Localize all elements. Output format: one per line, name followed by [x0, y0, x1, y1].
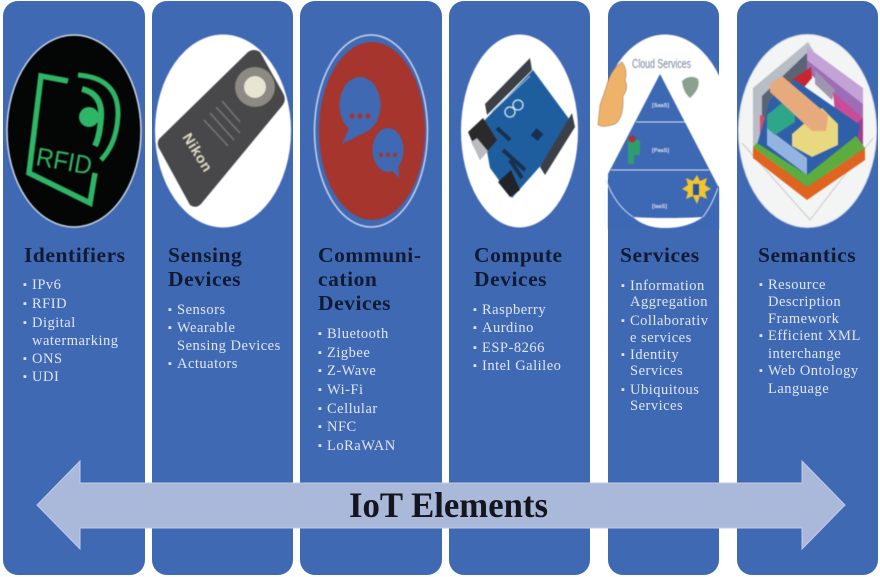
heading: Sensing Devices — [168, 243, 242, 291]
list: services: Services — [630, 398, 683, 414]
heading: Semantics: Semantics — [758, 243, 856, 267]
icon: Arduino board — [461, 34, 578, 228]
list: compute devices: Raspberry — [482, 302, 546, 318]
list: services: Identity — [630, 346, 679, 362]
list: communication devices: ▪ — [318, 384, 322, 396]
icon: Nikon remote — [155, 34, 291, 228]
list: sensing devices — [168, 302, 281, 372]
list: sensing devices: Sensing Devices — [177, 338, 281, 354]
list: sensing devices: ▪ — [168, 358, 172, 370]
list: services: Information — [630, 278, 705, 294]
list: sensing devices: Sensors — [177, 302, 226, 318]
list: compute devices: ▪ — [473, 304, 477, 316]
panel: compute devices — [449, 1, 590, 575]
icon: cloud services pyramid: [IaaS] — [652, 204, 667, 210]
list: identifiers: ▪ — [23, 298, 27, 310]
icon: semantics stack diagram — [738, 34, 876, 228]
icon: cloud services pyramid: Cloud Services — [632, 56, 691, 71]
list: communication devices: ▪ — [318, 421, 322, 433]
icon: RFID tag — [7, 35, 141, 227]
list: communication devices: LoRaWAN — [327, 438, 396, 454]
list: communication devices: ▪ — [318, 365, 322, 377]
list: identifiers: watermarking — [32, 333, 119, 349]
list: compute devices: ▪ — [473, 342, 477, 354]
list: compute devices: ▪ — [473, 360, 477, 372]
list: identifiers: RFID — [32, 296, 67, 312]
list: semantics: Resource — [768, 277, 826, 293]
list: sensing devices: ▪ — [168, 304, 172, 316]
panel: services — [608, 1, 719, 575]
list: services: ▪ — [621, 384, 625, 396]
list: compute devices: Intel Galileo — [482, 358, 561, 374]
list: communication devices: Zigbee — [327, 345, 370, 361]
panel: communication devices — [300, 1, 442, 575]
list: services: Ubiquitous — [630, 382, 699, 398]
list: identifiers: ▪ — [23, 371, 27, 383]
list: identifiers: ONS — [32, 351, 63, 367]
heading: Communication Devices: cation — [318, 267, 377, 291]
list: semantics: ▪ — [759, 279, 763, 291]
list: semantics: ▪ — [759, 330, 763, 342]
icon: cloud services pyramid: [PaaS] — [652, 148, 669, 154]
list: identifiers — [23, 277, 119, 385]
list: identifiers: IPv6 — [32, 277, 61, 293]
list: semantics: Language — [768, 381, 829, 397]
list: compute devices: ESP-8266 — [482, 340, 545, 356]
list: identifiers: ▪ — [23, 353, 27, 365]
icon: Nikon remote: Nikon — [179, 131, 215, 175]
panel: identifiers — [3, 1, 145, 575]
list: semantics: Web Ontology — [768, 363, 859, 379]
list: services: e services — [630, 330, 692, 346]
list: semantics: Description — [768, 294, 841, 310]
list: semantics: ▪ — [759, 365, 763, 377]
list: semantics — [759, 277, 861, 397]
icon: RFID tag: RFID — [34, 141, 94, 181]
heading: Compute Devices: Devices — [474, 267, 547, 291]
list: services — [621, 278, 708, 414]
list: compute devices: Aurdino — [482, 320, 534, 336]
list: identifiers: Digital — [32, 315, 76, 331]
list: communication devices — [318, 326, 396, 454]
list: communication devices: ▪ — [318, 347, 322, 359]
list: services: Collaborativ — [630, 312, 708, 328]
list: communication devices: Cellular — [327, 401, 378, 417]
list: communication devices: NFC — [327, 419, 357, 435]
list: sensing devices: Actuators — [177, 356, 238, 372]
list: semantics: interchange — [768, 346, 841, 362]
icon: cloud services pyramid: [SaaS] — [652, 103, 669, 109]
list: identifiers: ▪ — [23, 279, 27, 291]
list: communication devices: Bluetooth — [327, 326, 389, 342]
heading: Sensing Devices: Devices — [168, 267, 241, 291]
list: sensing devices: ▪ — [168, 322, 172, 334]
list: sensing devices: Wearable — [177, 320, 235, 336]
list: identifiers: ▪ — [23, 317, 27, 329]
heading: Compute Devices — [474, 243, 563, 291]
list: communication devices: Wi-Fi — [327, 382, 364, 398]
list: services: ▪ — [621, 280, 625, 292]
list: compute devices — [473, 302, 561, 374]
heading: Communication Devices: Communi- — [318, 243, 422, 267]
list: communication devices: ▪ — [318, 440, 322, 452]
heading: Identifiers: Identifiers — [24, 243, 126, 267]
heading: Services: Services — [620, 243, 700, 267]
arrow label: IoT Elements — [349, 485, 548, 525]
panel: semantics — [737, 1, 878, 575]
panel: sensing devices — [152, 1, 293, 575]
icon: chat bubbles — [314, 35, 428, 227]
list: communication devices: ▪ — [318, 403, 322, 415]
heading: Communication Devices — [318, 243, 422, 315]
list: compute devices: ▪ — [473, 322, 477, 334]
list: services: Aggregation — [630, 294, 708, 310]
list: identifiers: UDI — [32, 369, 59, 385]
list: semantics: Efficient XML — [768, 328, 861, 344]
heading: Communication Devices: Devices — [318, 291, 391, 315]
list: services: ▪ — [621, 348, 625, 360]
list: communication devices: ▪ — [318, 328, 322, 340]
heading: Compute Devices: Compute — [474, 243, 563, 267]
list: semantics: Framework — [768, 311, 839, 327]
list: communication devices: Z-Wave — [327, 363, 376, 379]
icon: cloud services pyramid — [598, 34, 731, 229]
list: services: ▪ — [621, 314, 625, 326]
list: services: Services — [630, 362, 683, 378]
heading: Sensing Devices: Sensing — [168, 243, 242, 267]
